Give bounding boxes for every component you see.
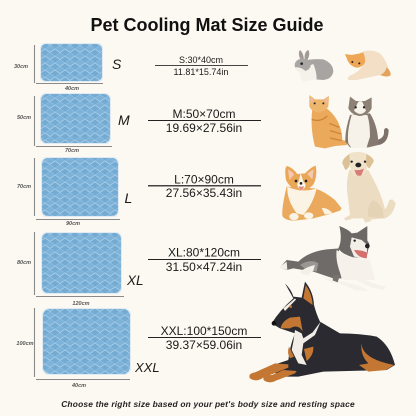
size label M: M [118, 112, 130, 128]
mat M with dimensions: 70cm [65, 148, 79, 154]
mat L with dimensions: 90cm [66, 221, 80, 227]
mat XXL with dimensions: 40cm [71, 383, 86, 389]
mat XXL with dimensions [16, 308, 131, 389]
mat XL with dimensions: 80cm [17, 260, 31, 266]
mat M with dimensions: 50cm [17, 115, 31, 121]
size text XXL: 39.37×59.06in [166, 338, 242, 352]
icon: collie front legs [320, 275, 386, 291]
size text S: 11.81*15.74in [174, 67, 228, 77]
mat M with dimensions [17, 93, 112, 154]
size text M: M:50×70cm [172, 107, 236, 121]
size text XL: 31.50×47.24in [166, 260, 242, 274]
icon: golden retriever [342, 152, 396, 223]
mat L with dimensions [17, 157, 120, 227]
size text XL: XL:80*120cm [168, 246, 240, 260]
icon: gray cat [345, 97, 389, 148]
size text L: 27.56×35.43in [166, 186, 242, 200]
size text M [148, 107, 261, 135]
icon: doberman [249, 282, 395, 382]
size text XL [148, 246, 261, 274]
mat XXL with dimensions: 100cm [16, 341, 34, 347]
mat L with dimensions: 70cm [17, 184, 31, 190]
icon: orange cat lying [345, 51, 391, 80]
size label S: S [112, 56, 122, 72]
mat XL with dimensions [17, 232, 124, 307]
title: Pet Cooling Mat Size Guide [90, 15, 324, 35]
mat S with dimensions: 40cm [64, 86, 79, 92]
mat XL with dimensions: 120cm [72, 301, 90, 307]
footer note: Choose the right size based on your pet's body size and resting space [61, 399, 355, 409]
size text M: 19.69×27.56in [166, 121, 242, 135]
size label L: L [124, 190, 132, 206]
size label XXL: XXL [134, 360, 160, 375]
icon: border collie [279, 226, 375, 280]
size text L [148, 172, 261, 200]
size label XL: XL [126, 273, 144, 288]
icon: corgi [282, 166, 342, 221]
icon: tabby cat [309, 95, 348, 148]
size text XXL [148, 324, 261, 352]
icon: rabbit [295, 50, 333, 82]
size text L: L:70×90cm [174, 172, 234, 186]
size text XXL: XXL:100*150cm [161, 324, 247, 338]
size text S: S:30*40cm [179, 55, 223, 65]
mat S with dimensions: 30cm [14, 64, 28, 70]
size text S [155, 55, 248, 77]
mat S with dimensions [14, 43, 103, 92]
